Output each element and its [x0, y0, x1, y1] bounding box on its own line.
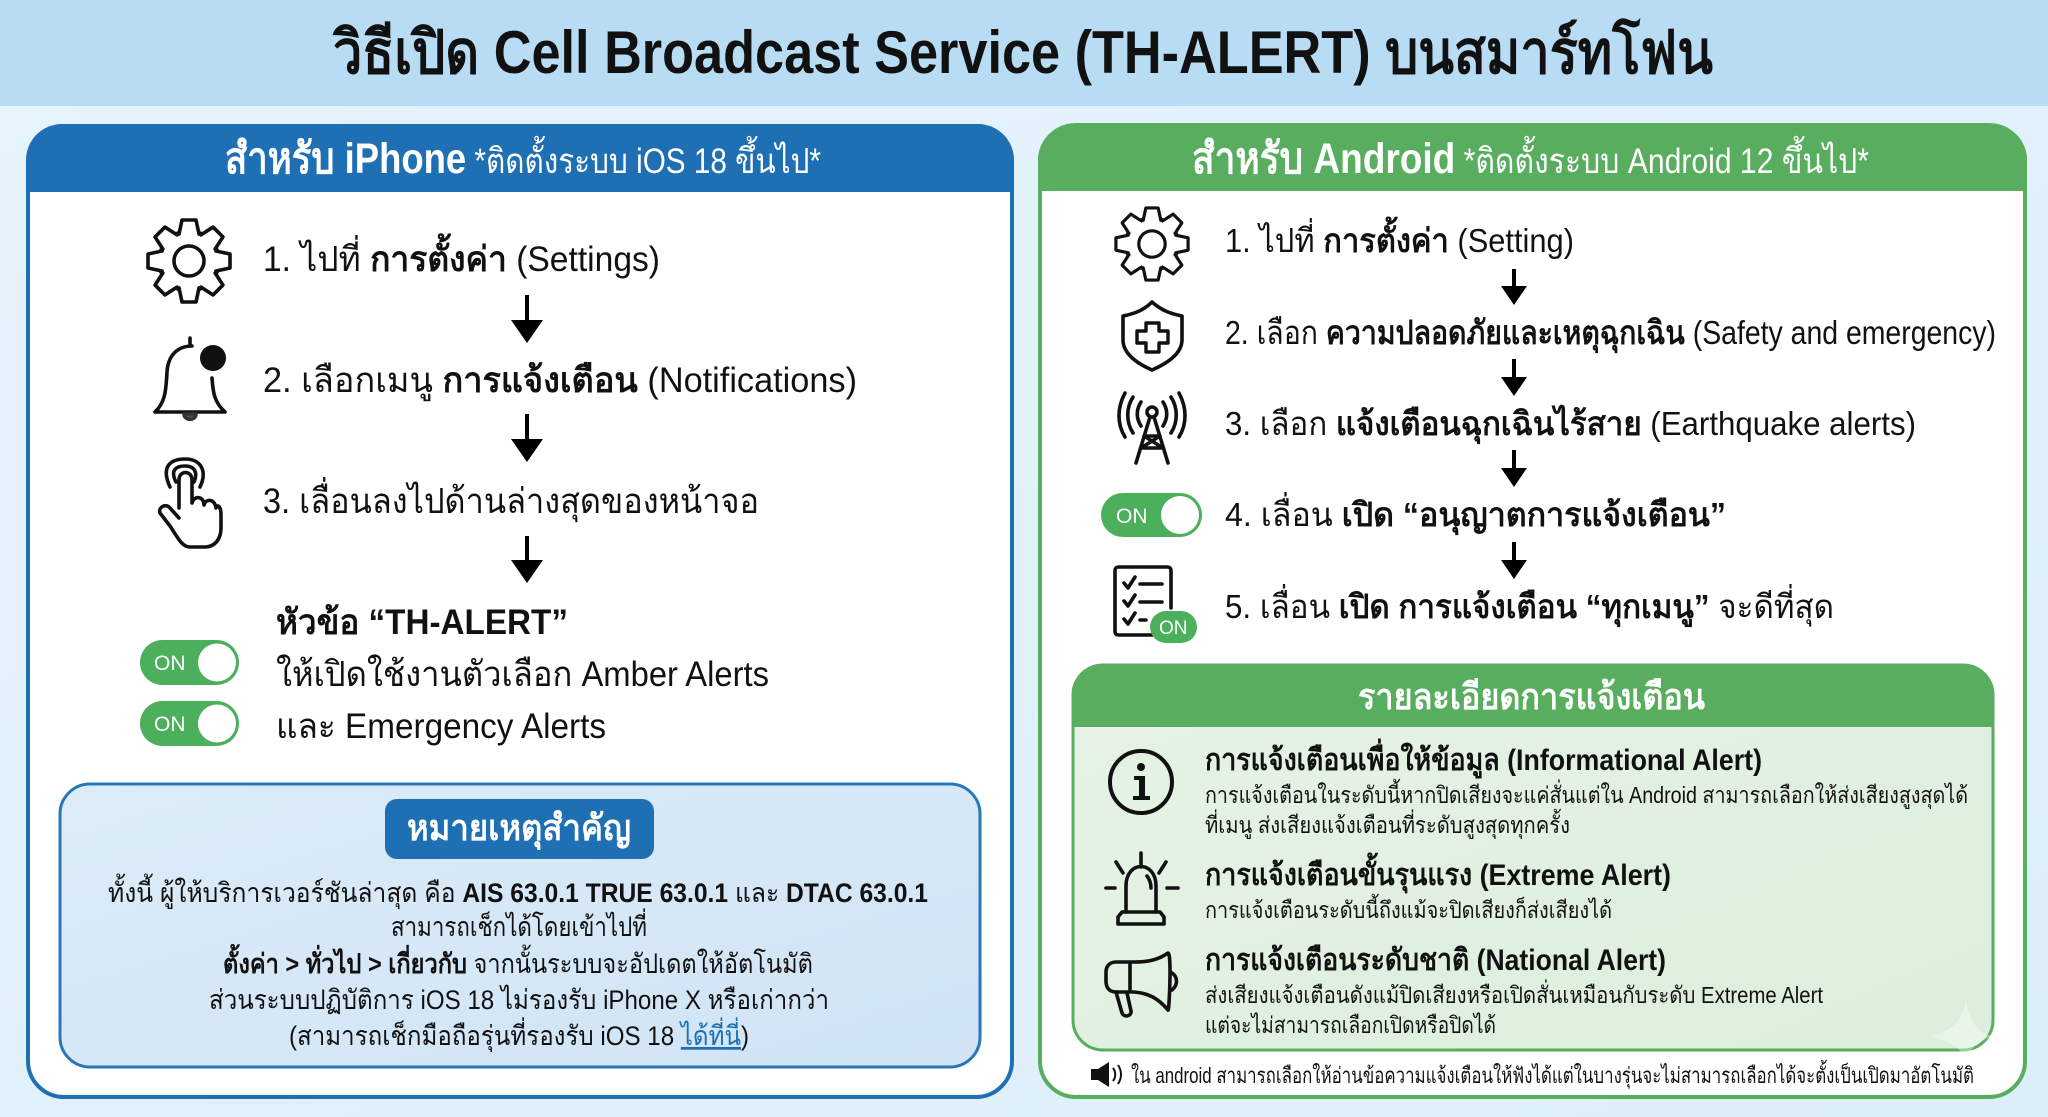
arrow [1501, 269, 1527, 305]
note text: (สามารถเช็กมือถือรุ่นที่รองรับ iOS 18 ได้ที่นี่) [289, 1017, 749, 1053]
step 1 text: 1. ไปที่ การตั้งค่า (Settings) [263, 233, 660, 279]
alert details box [1072, 664, 1994, 1060]
icon: shield [1123, 302, 1182, 370]
iPhone header: สำหรับ iPhone *ติดตั้งระบบ iOS 18 ขึ้นไป* [225, 135, 821, 183]
icon: settings gear [1116, 208, 1188, 280]
Android header: สำหรับ Android *ติดตั้งระบบ Android 12 ขึ้นไป* [1192, 135, 1869, 183]
note text: สามารถเช็กได้โดยเข้าไปที่ [391, 908, 647, 942]
toggle on 2 [140, 701, 239, 746]
watermark sparkle [1932, 1000, 1994, 1060]
national alert [1205, 944, 1824, 1038]
icon: speaker [1091, 1062, 1121, 1087]
panel: Android [1038, 124, 2027, 1097]
toggle on 1: ON [154, 652, 186, 675]
note heading pill: หมายเหตุสำคัญ [407, 807, 631, 851]
toggle on: ON [1116, 505, 1148, 528]
details heading: รายละเอียดการแจ้งเตือน [1358, 676, 1705, 717]
note heading pill [385, 799, 654, 859]
icon: settings gear [148, 220, 230, 302]
national alert: แต่จะไม่สามารถเลือกเปิดหรือปิดได้ [1205, 1012, 1496, 1038]
informational alert [1205, 738, 1968, 839]
note text: ทั้งนี้ ผู้ให้บริการเวอร์ชันล่าสุด คือ AIS 63.0.1 TRUE 63.0.1 และ DTAC 63.0.1 [108, 873, 928, 910]
national alert: ส่งเสียงแจ้งเตือนดังแม้ปิดเสียงหรือเปิดสั่นเหมือนกับระดับ Extreme Alert [1205, 979, 1824, 1008]
note text: ตั้งค่า > ทั่วไป > เกี่ยวกับ จากนั้นระบบจะอัปเดตให้อัตโนมัติ [223, 943, 813, 979]
step 1 text: 1. ไปที่ การตั้งค่า (Setting) [1225, 216, 1574, 259]
toggle on 2: ON [154, 713, 186, 736]
step 4 text: 4. เลื่อน เปิด “อนุญาตการแจ้งเตือน” [1225, 492, 1726, 536]
note text: ส่วนระบบปฏิบัติการ iOS 18 ไม่รองรับ iPhone X หรือเก่ากว่า [209, 985, 829, 1015]
icon: megaphone [1106, 953, 1176, 1016]
extreme alert: การแจ้งเตือนระดับนี้ถึงแม้จะปิดเสียงก็ส่งเสียงได้ [1205, 894, 1612, 923]
amber alerts line: ให้เปิดใช้งานตัวเลือก Amber Alerts [276, 654, 769, 694]
title band: วิธีเปิด Cell Broadcast Service (TH-ALERT) บนสมาร์ทโฟน [332, 17, 1713, 86]
icon: tapping hand [160, 459, 221, 547]
TH-ALERT heading: หัวข้อ “TH-ALERT” [276, 603, 568, 642]
extreme alert: การแจ้งเตือนขั้นรุนแรง (Extreme Alert) [1205, 852, 1671, 894]
toggle on 1 [140, 640, 239, 685]
panel: iPhone [26, 124, 1014, 1097]
icon: checklist with on badge [1115, 567, 1197, 643]
step 3 text: 3. เลื่อนลงไปด้านล่างสุดของหน้าจอ [263, 477, 759, 522]
note text [108, 873, 928, 1053]
step 5 text: 5. เลื่อน เปิด การแจ้งเตือน “ทุกเมนู” จะดีที่สุด [1225, 584, 1834, 628]
icon: info [1110, 751, 1172, 813]
arrow [1501, 542, 1527, 579]
arrow [1501, 359, 1527, 396]
note box [60, 784, 980, 1067]
icon: signal tower [1119, 393, 1185, 463]
informational alert: ที่เมนู ส่งเสียงแจ้งเตือนที่ระดับสูงสุดทุกครั้ง [1205, 809, 1570, 839]
icon: siren [1106, 853, 1178, 924]
arrow 1 [511, 295, 543, 343]
arrow [1501, 450, 1527, 487]
emergency alerts line: และ Emergency Alerts [276, 707, 606, 746]
step 2 text: 2. เลือกเมนู การแจ้งเตือน (Notifications) [263, 361, 857, 401]
step 2 text: 2. เลือก ความปลอดภัยและเหตุฉุกเฉิน (Safety and emergency) [1225, 314, 1996, 354]
icon: checklist with on badge: ON [1159, 618, 1188, 639]
national alert: การแจ้งเตือนระดับชาติ (National Alert) [1205, 944, 1666, 977]
step 3 text: 3. เลือก แจ้งเตือนฉุกเฉินไร้สาย (Earthquake alerts) [1225, 404, 1916, 445]
icon: bell [155, 338, 226, 419]
arrow 2 [511, 414, 543, 462]
toggle on [1101, 493, 1202, 537]
arrow 3 [511, 536, 543, 583]
informational alert: การแจ้งเตือนเพื่อให้ข้อมูล (Informational Alert) [1205, 738, 1762, 779]
title band [0, 0, 2048, 106]
extreme alert [1205, 852, 1671, 923]
